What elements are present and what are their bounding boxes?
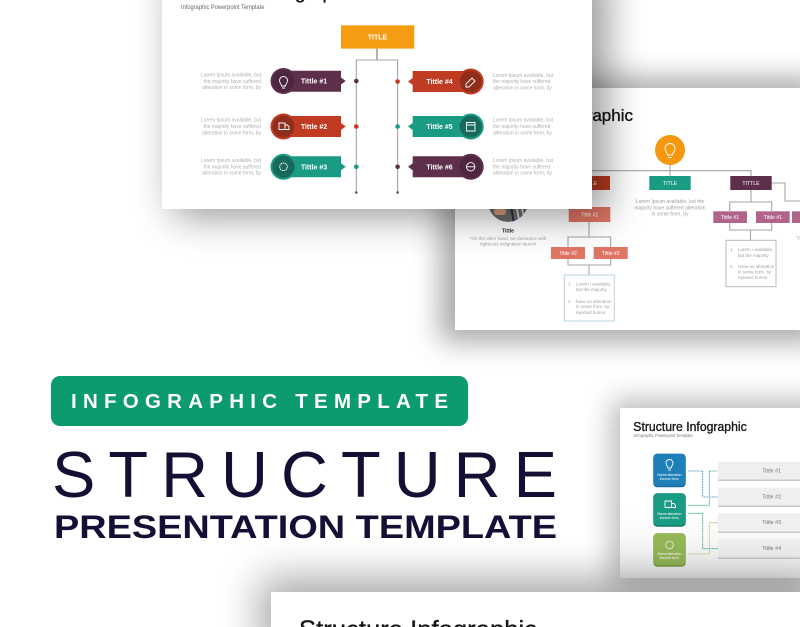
- left descriptions: the majority have suffered: [204, 79, 261, 85]
- badge: infographic template: INFOGRAPHIC TEMPLATE: [71, 390, 448, 413]
- pill: title 3: Tittle #3: [301, 164, 327, 171]
- list note mauve: but the majority: [738, 253, 770, 258]
- lime box: Insome form,: [660, 556, 679, 560]
- pill: title 5: Tittle #5: [426, 124, 453, 131]
- pill: title 1: [270, 68, 346, 94]
- red title box: [569, 176, 610, 190]
- list note blue: injected humor: [576, 310, 606, 315]
- red title box: TITLE: [583, 181, 598, 187]
- list note blue: 1.: [568, 282, 572, 286]
- tree connector lines: [355, 49, 399, 194]
- purple title box: TITTLE: [742, 181, 760, 187]
- pill: title 2: Tittle #2: [301, 124, 327, 131]
- list note mauve: 2.: [730, 264, 734, 269]
- pill: title 4: [408, 68, 484, 94]
- green title box: TITLE: [663, 181, 678, 187]
- list note mauve: in some form, by: [738, 270, 772, 274]
- person name and quote: [470, 228, 547, 246]
- salmon branch boxes: Tittle #2: [602, 251, 620, 257]
- right descriptions: Lorem Ipsum available, but: [493, 118, 554, 124]
- pink branch boxes: Tittle #1: [721, 215, 739, 221]
- title bars: Tittle #3: [762, 520, 781, 526]
- purple title box: [730, 176, 772, 190]
- pill: title 6: Tittle #6: [426, 164, 453, 171]
- list note blue: in some form, by: [576, 304, 610, 309]
- list note mauve: [726, 240, 776, 287]
- icon: orange bulb circle: [655, 135, 685, 165]
- green column paragraph: Lorem Ipsum available, but the: [636, 199, 704, 205]
- list note mauve: Have su alteration: [738, 264, 775, 269]
- green column paragraph: majority have suffered alteration: [634, 205, 706, 211]
- blue box: Name alteration: [658, 473, 682, 477]
- green column paragraph: [634, 199, 706, 218]
- dotted connectors: [688, 471, 718, 554]
- slide: main org chart with six pills: [162, 0, 606, 216]
- right descriptions: alteration in some form, by: [493, 86, 552, 92]
- left descriptions: [201, 72, 262, 177]
- green column paragraph: in some form, by: [652, 212, 689, 218]
- list note mauve: Lorem i available,: [738, 247, 773, 252]
- left descriptions: Lorem Ipsum available, but: [201, 72, 262, 78]
- slide subtitle: Infographic Powerpoint Template: [181, 5, 265, 11]
- pink branch boxes: [713, 211, 800, 223]
- person name and quote: righteous indignation launch: [480, 242, 537, 246]
- badge: infographic template: [51, 376, 468, 426]
- title bars: Tittle #2: [762, 494, 781, 500]
- lime box: Name alteration: [658, 552, 682, 556]
- slide: bottom cropped preview: [260, 578, 800, 627]
- pill: title 5: [408, 114, 484, 140]
- left descriptions: the majority have suffered: [204, 124, 261, 130]
- person name and quote: Tittle: [502, 228, 514, 234]
- slide: coloured boxes linked to title bars: [612, 400, 800, 586]
- left descriptions: alteration in some form, by: [202, 85, 261, 91]
- orange title box: [341, 25, 414, 49]
- list note blue: [564, 275, 614, 321]
- green box: [653, 493, 686, 527]
- pill: title 3: [270, 154, 346, 180]
- list note blue: but the majority: [576, 287, 608, 292]
- right descriptions: [493, 73, 554, 177]
- left descriptions: Lorem Ipsum available, but: [201, 118, 262, 124]
- pill: title 1: Tittle #1: [301, 78, 327, 86]
- right descriptions: the majority have suffered: [493, 79, 551, 85]
- right descriptions: alteration in some form, by: [493, 130, 552, 136]
- right descriptions: alteration in some form, by: [493, 171, 552, 177]
- slide: hierarchy with photo and coloured branches: [440, 78, 800, 342]
- org chart connectors: [568, 165, 800, 275]
- green box: Name alteration: [658, 512, 682, 516]
- left descriptions: Lorem Ipsum available, but: [201, 158, 262, 164]
- title bars: [718, 462, 800, 559]
- title bars: Tittle #1: [762, 469, 781, 475]
- blue box: Insome form,: [660, 477, 679, 481]
- green title box: [649, 176, 691, 190]
- right descriptions: the majority have suffered: [493, 164, 551, 170]
- heading: structure: STRUCTURE: [52, 438, 557, 511]
- salmon branch boxes: Tittle #2: [559, 251, 577, 257]
- green box: Insome form,: [660, 516, 679, 520]
- salmon branch boxes: [551, 207, 628, 259]
- right descriptions: Lorem Ipsum available, but: [493, 158, 554, 164]
- lime box: [653, 533, 686, 567]
- person name and quote: "On the other hand, we denounce with: [470, 236, 547, 241]
- blue box: [653, 454, 686, 487]
- list note blue: have su alteration: [576, 299, 612, 304]
- pink branch boxes: Tittle #1: [764, 215, 782, 221]
- slide title: Structure Infographic: [475, 106, 633, 125]
- slide subtitle: Infographic Powerpoint Template: [634, 433, 693, 438]
- clipped quote fragment: "y: [796, 235, 800, 240]
- slide title: Structure Infographic: [633, 419, 747, 434]
- salmon branch boxes: Tittle #1: [581, 212, 599, 218]
- title bars: Tittle #4: [762, 546, 781, 552]
- orange title box: TITLE: [368, 34, 388, 42]
- right descriptions: the majority have suffered: [493, 124, 551, 130]
- list note mauve: 1.: [730, 247, 734, 252]
- list note mauve: injected humor: [738, 275, 768, 280]
- pill: title 4: Tittle #4: [426, 79, 453, 86]
- timeline dots: [354, 79, 400, 169]
- list note blue: Lorem i available,: [576, 282, 611, 286]
- left descriptions: alteration in some form, by: [202, 130, 261, 136]
- list note blue: 2.: [568, 299, 572, 304]
- photo avatar: [490, 209, 526, 222]
- right descriptions: Lorem Ipsum available, but: [493, 73, 554, 79]
- heading: presentation template: PRESENTATION TEMPLATE: [54, 509, 557, 545]
- left descriptions: alteration in some form, by: [202, 171, 261, 177]
- left descriptions: the majority have suffered: [204, 164, 261, 170]
- pill: title 6: [408, 154, 484, 180]
- pill: title 2: [270, 114, 346, 140]
